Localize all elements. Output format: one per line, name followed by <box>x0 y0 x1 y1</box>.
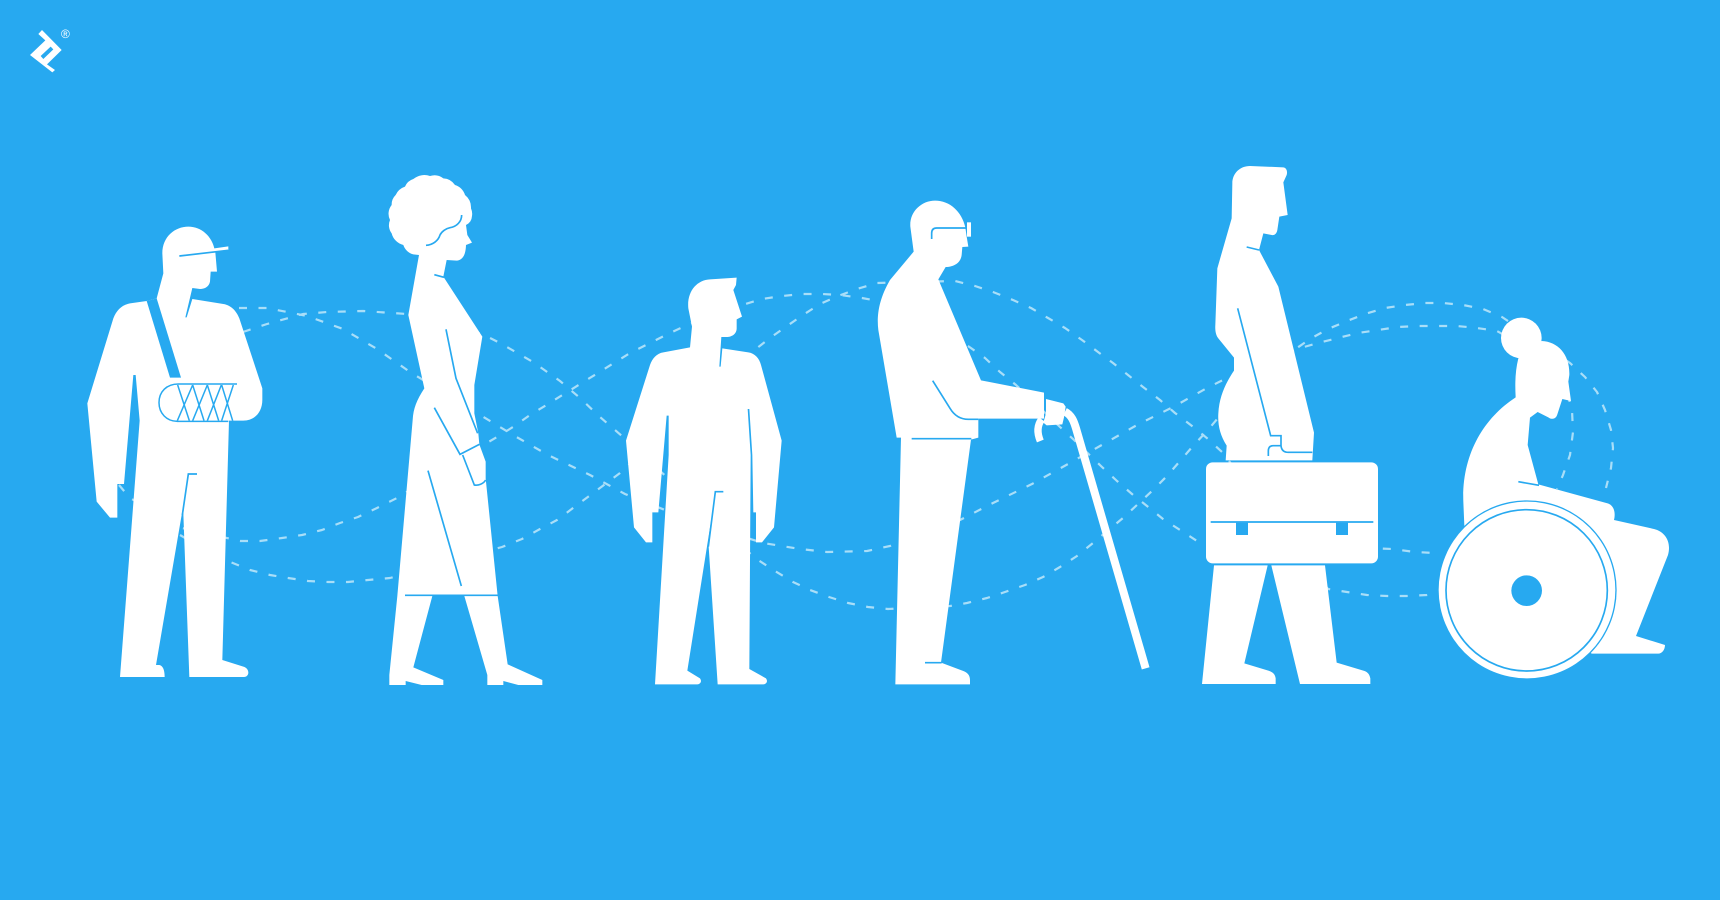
glasses lens <box>967 222 971 237</box>
figure 6: woman in wheelchair <box>1437 318 1669 680</box>
wave 3 <box>119 294 1435 553</box>
thigh line <box>1518 482 1539 485</box>
wave 2 <box>243 303 1613 609</box>
figure 5: tall man with briefcase <box>1202 166 1378 684</box>
figure 1: man with arm in a sling <box>87 227 262 677</box>
cane <box>1065 412 1146 668</box>
hair bun <box>1501 318 1542 358</box>
wheelchair wheel <box>1437 500 1617 680</box>
briefcase <box>1206 462 1378 563</box>
inseam line <box>708 492 723 547</box>
coat pocket line <box>933 381 978 419</box>
inseam line <box>182 474 197 515</box>
coat hem and foot lines <box>912 439 971 663</box>
silhouette <box>626 278 782 684</box>
silhouette <box>389 175 542 685</box>
wave 1 <box>239 308 1573 552</box>
hand <box>1043 399 1066 425</box>
dashed connecting waves <box>119 281 1613 609</box>
silhouette <box>1463 341 1669 654</box>
logo: Toptal mark: ® <box>61 27 70 41</box>
upper body <box>1215 166 1314 460</box>
glasses frame <box>932 228 967 239</box>
silhouette <box>87 227 262 677</box>
figure 2: woman with curly hair <box>389 175 542 685</box>
figure 3: man looking sideways <box>626 278 782 684</box>
cane hook <box>1038 419 1042 441</box>
blue detail lines <box>405 215 499 595</box>
sling strap <box>147 298 181 378</box>
cap brim <box>179 250 228 256</box>
left leg <box>1202 565 1276 684</box>
logo: Toptal mark <box>30 27 70 72</box>
cast <box>159 384 237 421</box>
wave 4 <box>180 281 1438 596</box>
silhouette <box>878 201 1044 684</box>
blue detail lines <box>1238 247 1312 456</box>
right leg <box>1271 565 1370 684</box>
figure 4: elderly man with cane <box>878 201 1146 684</box>
